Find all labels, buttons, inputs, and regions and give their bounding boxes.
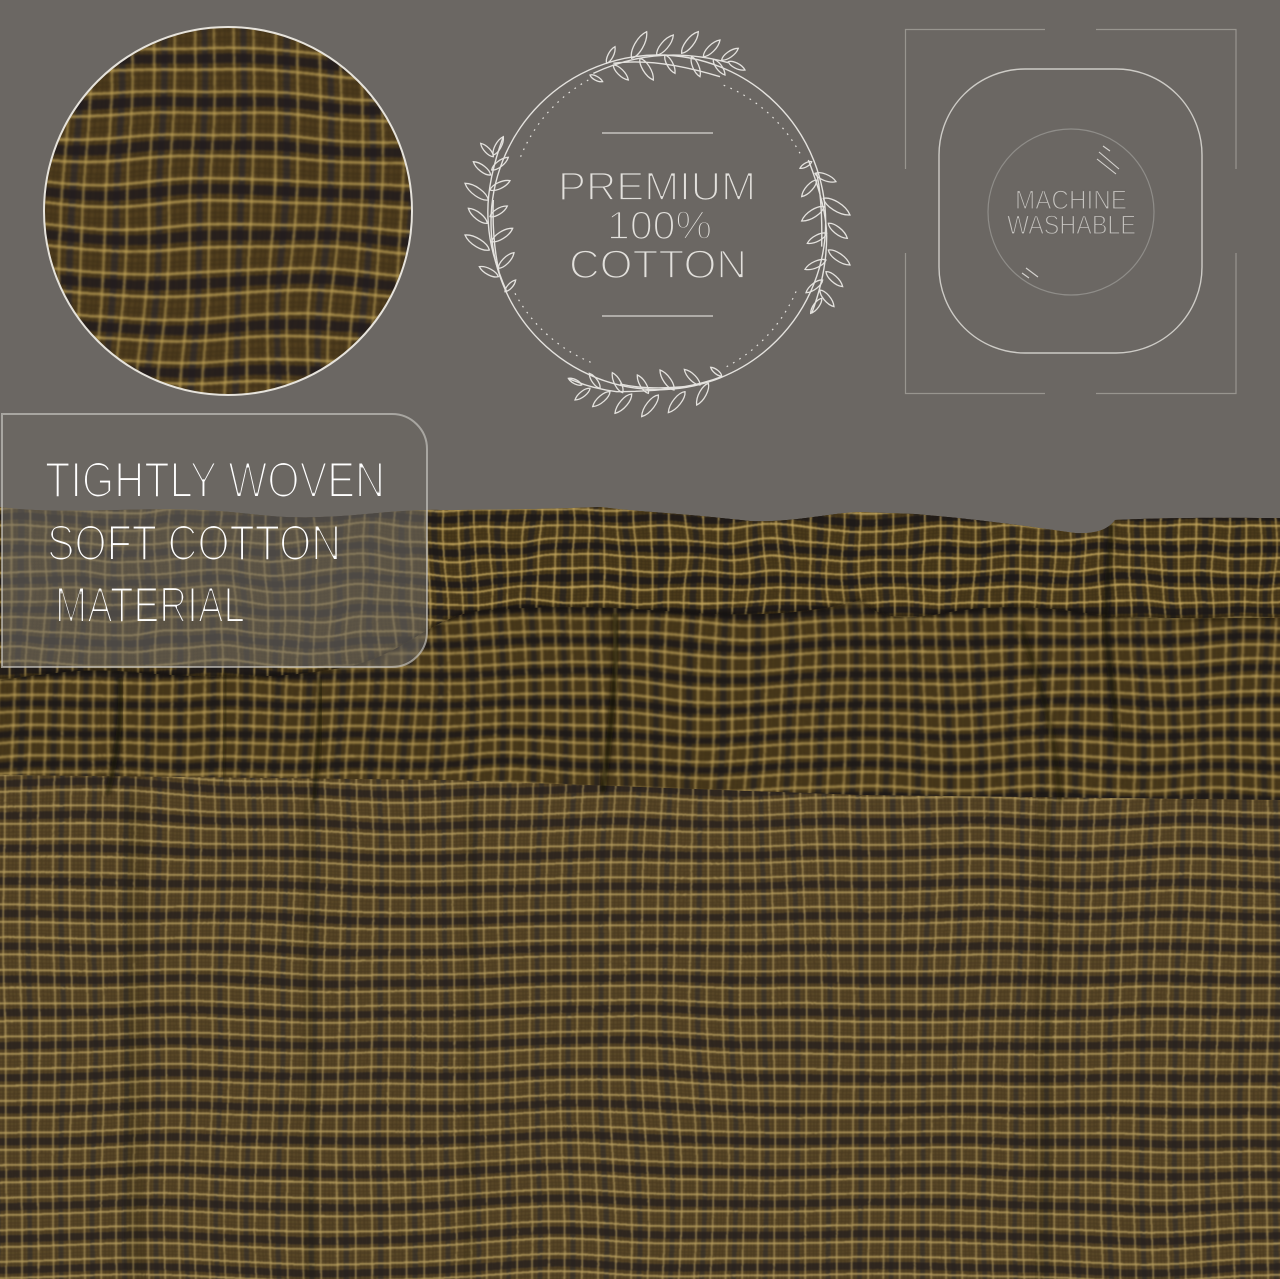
callout text: TIGHTLY WOVEN xyxy=(45,452,385,508)
premium cotton wreath badge xyxy=(463,29,852,419)
badge text: PREMIUM xyxy=(558,165,756,209)
panel: translucent text callout xyxy=(2,414,427,667)
fabric swatch circle xyxy=(43,26,413,396)
corner frame xyxy=(906,30,1236,394)
callout text: SOFT COTTON xyxy=(47,515,341,571)
washable text: MACHINE xyxy=(1015,185,1127,215)
washable text xyxy=(1007,185,1136,240)
glint marks xyxy=(1022,146,1119,278)
inner circle xyxy=(988,129,1154,295)
left branch leaves xyxy=(463,135,517,293)
wreath xyxy=(463,29,852,419)
machine washable icon xyxy=(906,30,1236,394)
badge text: 100% xyxy=(607,204,712,248)
badge text: COTTON xyxy=(569,243,747,287)
top branch leaves xyxy=(589,29,746,83)
right branch leaves xyxy=(799,160,852,315)
callout text: MATERIAL xyxy=(55,577,245,633)
curtain fabric photo xyxy=(0,480,1280,1279)
callout text xyxy=(45,452,385,633)
bottom branch leaves xyxy=(567,366,723,419)
badge text xyxy=(558,165,756,287)
washable text: WASHABLE xyxy=(1007,210,1136,240)
rounded square outline xyxy=(939,69,1202,353)
